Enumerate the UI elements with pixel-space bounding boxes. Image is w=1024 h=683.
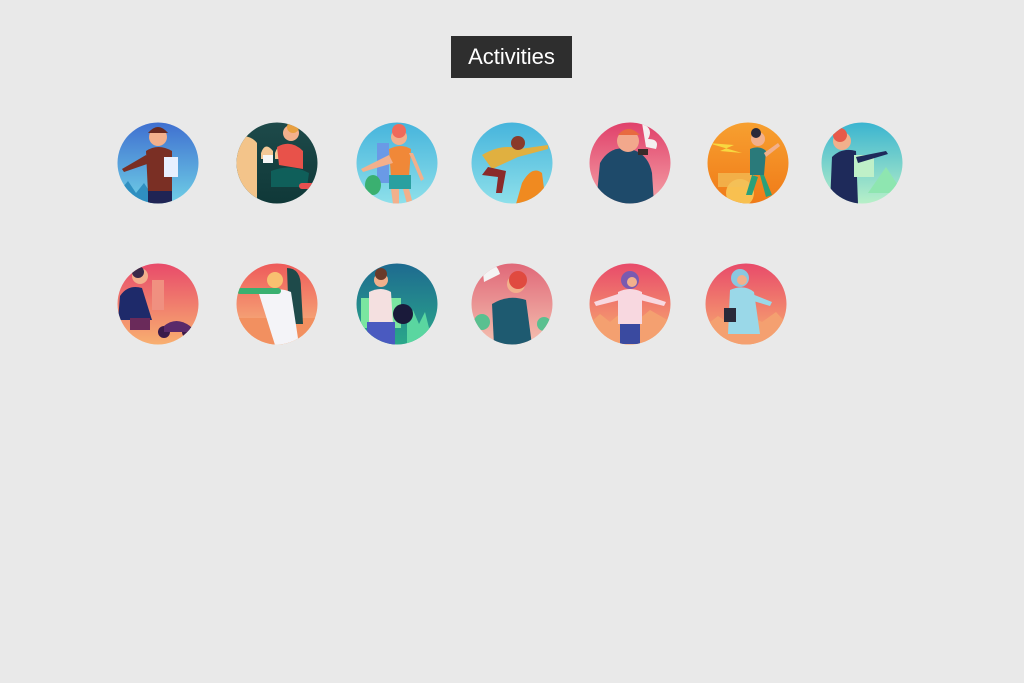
- icon: man with paper: [117, 122, 199, 205]
- icon: man with map: [821, 122, 903, 204]
- icon: running woman: [356, 122, 438, 204]
- icon: man with pipe: [589, 122, 671, 204]
- icon: woman reading at desk: [236, 121, 319, 204]
- icon: man with dog: [471, 122, 553, 204]
- icon: woman with tablet: [705, 263, 787, 345]
- icon: woman with violin: [236, 263, 318, 346]
- icon: jogger on orange: [707, 122, 789, 207]
- icon: man with ball: [356, 263, 438, 346]
- title: Activities: [468, 44, 555, 69]
- icon: woman in headscarf arms open: [589, 263, 671, 345]
- title: [451, 36, 572, 78]
- icon: woman with cup: [471, 263, 553, 345]
- icon: woman with scooter: [117, 263, 199, 345]
